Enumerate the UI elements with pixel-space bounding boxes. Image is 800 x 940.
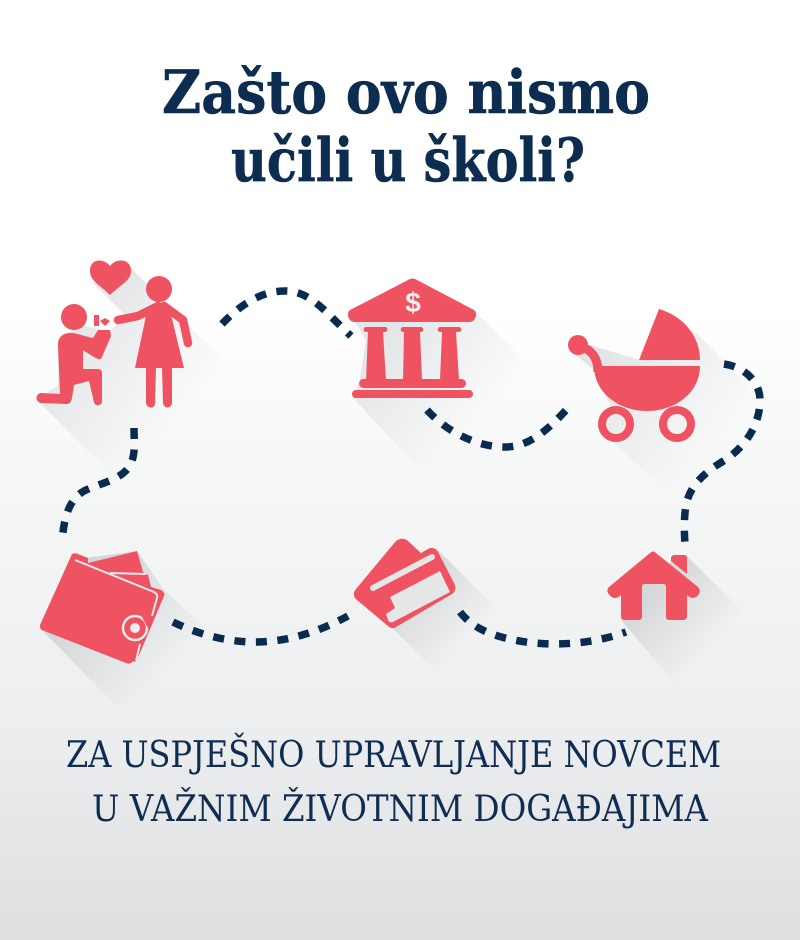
icon: couple proposing	[36, 261, 285, 485]
icon: baby stroller	[568, 309, 790, 495]
title	[162, 58, 650, 196]
subtitle	[66, 734, 721, 830]
wallet clasp	[123, 616, 152, 640]
icon: wallet	[40, 551, 245, 715]
subtitle: ZA USPJEŠNO UPRAVLJANJE NOVCEM	[66, 734, 721, 776]
icon: house	[607, 552, 770, 690]
title: učili u školi?	[231, 126, 585, 196]
subtitle: U VAŽNIM ŽIVOTNIM DOGAĐAJIMA	[92, 788, 709, 830]
icon: bank: $	[405, 287, 421, 318]
icon: credit cards	[354, 539, 520, 675]
icon: bank	[348, 278, 580, 475]
wallet flap seam	[75, 560, 157, 661]
title: Zašto ovo nismo	[162, 58, 650, 128]
dashed route between life events	[62, 291, 760, 644]
